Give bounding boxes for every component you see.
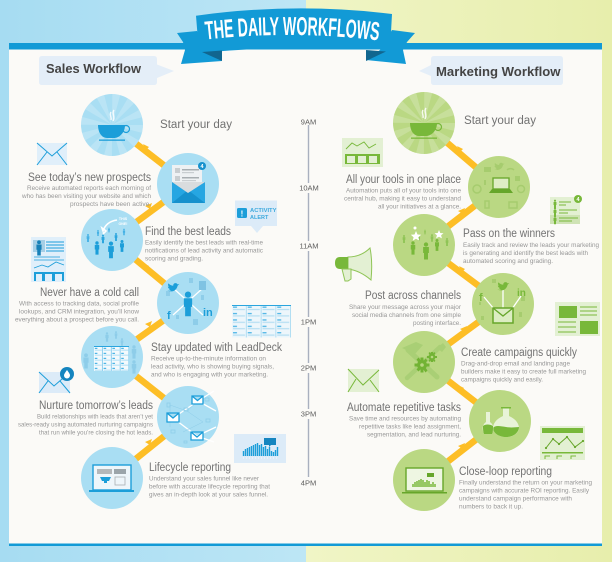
title ribbon	[177, 8, 415, 64]
step circle: sales best leads people: THIS	[119, 217, 128, 221]
text block: automate repetitive tasks: repetitive tasks like lead assignment,	[359, 424, 461, 430]
text block: find the best leads: scoring and grading.	[145, 256, 203, 262]
timeline: 11AM	[299, 242, 319, 251]
callout: activity alert: ALERT	[250, 215, 269, 221]
icon: green lead list	[550, 195, 582, 224]
text block: post across channels: Share your message across your major	[349, 304, 462, 311]
step circle: sales social profile	[157, 272, 219, 334]
text block: close-loop reporting: numbers to back it up.	[459, 504, 523, 510]
title text: THE DAILY WORKFLOWS	[204, 17, 380, 40]
icon: prospect profile document	[31, 237, 66, 282]
text block: lifecycle reporting: Lifecycle reporting	[149, 462, 231, 474]
text block: automate repetitive tasks: Save time and resources by automating	[349, 416, 461, 422]
text block: stay updated with leaddeck: and who is engaging with your marketing.	[151, 372, 268, 378]
text block: create campaigns quickly: Drag-and-drop email and landing page	[461, 360, 570, 368]
text block: post across channels: social media channels from one simple	[352, 312, 461, 319]
text block: all your tools in one place: central hub, making it easy to understand	[344, 196, 461, 202]
step circle: marketing post across channels: f	[479, 292, 483, 304]
callout: activity alert: ACTIVITY	[250, 208, 277, 214]
text block: post across channels: Post across channels	[365, 290, 461, 302]
callout: activity alert	[235, 200, 277, 233]
text block: find the best leads	[145, 226, 264, 262]
text block: find the best leads: Easily identify the best leads with real-time	[145, 240, 263, 246]
text block: pass on the winners: is generating and identify the best leads with	[463, 250, 588, 257]
icon: green lead list: 4	[576, 197, 580, 203]
text block: never have a cold call: With access to tracking data, social profile	[19, 300, 139, 308]
text block: create campaigns quickly	[461, 347, 586, 384]
text block: nurture tomorrow's leads: Build relationships with leads that aren’t yet	[37, 414, 153, 420]
text block: find the best leads: notifications of lead activity and automatic	[145, 248, 264, 254]
text block: stay updated with leaddeck: Stay updated with LeadDeck	[151, 342, 282, 354]
icon: lifecycle bar chart	[234, 434, 286, 463]
step circle: sales start your day	[81, 94, 143, 156]
step circle: sales best leads people	[81, 209, 143, 271]
top blue bar	[9, 43, 602, 50]
text block: nurture tomorrow's leads	[18, 400, 153, 436]
text block: lifecycle reporting	[149, 462, 270, 498]
text block: never have a cold call: lookups, and CRM integration, you’ll know	[19, 308, 139, 316]
callout: activity alert: !	[241, 210, 243, 218]
text: marketing start your day: Start your day	[464, 115, 536, 127]
bottom blue bar	[9, 544, 602, 546]
step circle: marketing automate flasks	[469, 390, 531, 452]
step circle: sales new prospects envelope	[157, 153, 219, 215]
text block: lifecycle reporting: Understand your sales funnel like never	[149, 476, 260, 482]
text block: stay updated with leaddeck: Receive up-to-the-minute information on	[151, 356, 266, 362]
text block: all your tools in one place	[344, 174, 461, 210]
text block: see today's new prospects: Receive automated reports each morning of	[27, 185, 151, 192]
heading bubble: Marketing Workflow	[419, 56, 563, 85]
step circle: sales best leads people: ONE!	[119, 222, 127, 226]
text block: nurture tomorrow's leads: sales-ready using automated nurturing campaigns	[18, 422, 153, 428]
text block: close-loop reporting: Close-loop reporting	[459, 466, 552, 478]
icon: leaddeck grid	[232, 305, 291, 338]
step circle: sales new prospects envelope: 4	[200, 164, 204, 170]
step circle: marketing start your day	[393, 92, 455, 154]
heading bubble: Sales Workflow: Sales Workflow	[46, 61, 142, 76]
text block: never have a cold call: Never have a cold call	[40, 287, 139, 299]
text block: all your tools in one place: all your initiatives at a glance.	[378, 204, 461, 210]
icon: green report chart	[540, 426, 585, 460]
text block: pass on the winners	[463, 228, 599, 265]
text block: all your tools in one place: Automation puts all of your tools into one	[346, 188, 461, 194]
text block: find the best leads: Find the best leads	[145, 226, 231, 238]
text block: close-loop reporting: understand campaign performance with	[459, 496, 572, 502]
icon: envelope blue	[37, 143, 67, 165]
icon: envelope green	[348, 369, 379, 392]
text block: see today's new prospects: prospects have been active.	[70, 201, 151, 208]
step circle: sales leaddeck	[81, 326, 143, 388]
text block: pass on the winners: Easily track and review the leads your marketing	[463, 242, 599, 249]
step circle: sales social profile: in	[203, 307, 213, 319]
text block: lifecycle reporting: before with accurate lifecycle reporting that	[149, 484, 270, 490]
text block: post across channels	[349, 290, 462, 327]
timeline: 1PM	[301, 318, 316, 327]
text block: never have a cold call: everything about a prospect before you call.	[15, 316, 139, 324]
timeline: 3PM	[301, 410, 316, 419]
marketing connectors	[424, 123, 503, 480]
text block: all your tools in one place: All your tools in one place	[346, 174, 461, 186]
icon: green dashboard chart	[342, 138, 383, 167]
text block: create campaigns quickly: Create campaigns quickly	[461, 347, 577, 359]
icon: green layout	[555, 302, 600, 336]
text block: see today's new prospects	[21, 172, 151, 208]
timeline: 10AM	[299, 184, 319, 193]
background: green right half	[306, 0, 612, 562]
icon: megaphone	[335, 248, 372, 281]
text block: nurture tomorrow's leads: that run while you’re closing the hot leads.	[39, 430, 153, 436]
step circle: marketing winners people	[393, 214, 455, 276]
text block: see today's new prospects: See today’s new prospects	[28, 172, 151, 184]
step circle: sales social profile: f	[167, 310, 171, 322]
text block: stay updated with leaddeck: lead activity, who is showing buying signals,	[151, 364, 274, 370]
text block: close-loop reporting: Finally understand the return on your marketing	[459, 480, 592, 486]
text block: automate repetitive tasks: segmentation, and lead nurturing.	[367, 432, 461, 438]
text block: automate repetitive tasks	[347, 402, 461, 438]
step circle: marketing post across channels: in	[517, 288, 526, 299]
heading bubble: Sales Workflow	[39, 56, 174, 85]
text block: close-loop reporting: campaigns with accurate ROI reporting. Easily	[459, 488, 590, 494]
text block: automate repetitive tasks: Automate repetitive tasks	[347, 402, 461, 414]
step circle: sales nurture network	[157, 386, 219, 448]
step circle: marketing create campaigns tools	[393, 331, 455, 393]
text block: post across channels: posting interface.	[413, 320, 461, 327]
text block: nurture tomorrow's leads: Nurture tomorrow’s leads	[39, 400, 153, 412]
text block: stay updated with leaddeck	[151, 342, 282, 378]
text block: pass on the winners: automated scoring and grading.	[463, 258, 553, 265]
step circle: sales lifecycle laptop	[81, 447, 143, 509]
timeline: 4PM	[301, 479, 316, 488]
step circle: marketing post across channels	[472, 273, 534, 335]
text block: lifecycle reporting: gives an in-depth look at your sales funnel.	[149, 492, 268, 498]
text block: close-loop reporting	[459, 466, 592, 510]
text block: create campaigns quickly: campaigns quickly and easily.	[461, 376, 543, 384]
text block: pass on the winners: Pass on the winners	[463, 228, 555, 240]
step circle: marketing tools laptop	[468, 156, 530, 218]
timeline: 2PM	[301, 364, 316, 373]
heading bubble: Marketing Workflow: Marketing Workflow	[436, 64, 561, 79]
text: sales start your day: Start your day	[160, 119, 232, 131]
sales connectors	[112, 125, 188, 478]
timeline: 9AM	[301, 118, 316, 126]
timeline	[296, 118, 322, 488]
text block: see today's new prospects: who has been visiting your website and which	[21, 193, 151, 200]
text block: create campaigns quickly: builders make it easy to create full marketing	[461, 368, 586, 376]
background: blue left half	[0, 0, 306, 562]
icon: envelope with drop badge	[39, 367, 74, 393]
text block: never have a cold call	[15, 287, 139, 324]
step circle: marketing close-loop monitor	[393, 449, 455, 511]
